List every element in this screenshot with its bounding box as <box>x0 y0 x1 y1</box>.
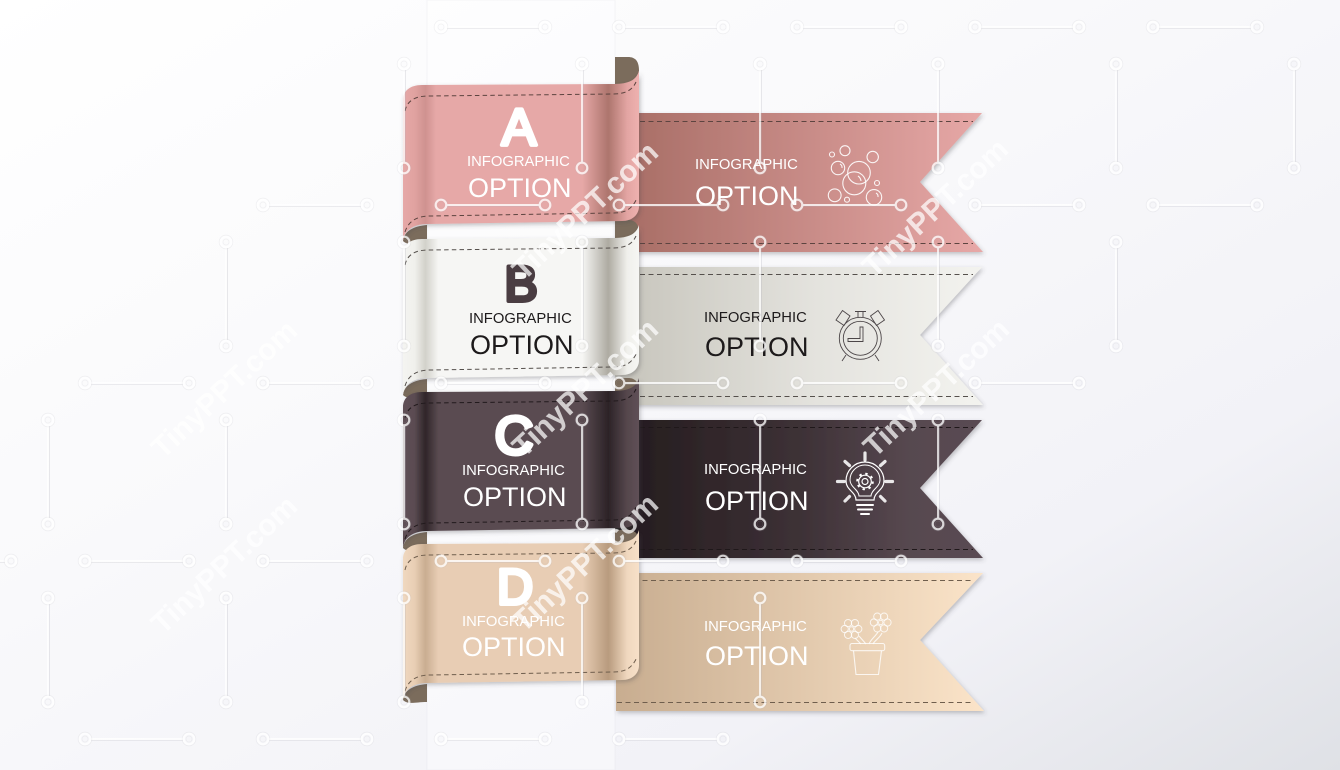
letter C: C <box>494 406 534 466</box>
watermarks: TinyPPT.com <box>506 136 665 287</box>
ribbon C text <box>462 463 567 512</box>
ribbon C text: INFOGRAPHIC <box>462 463 565 479</box>
flag B text: INFOGRAPHIC <box>704 310 807 326</box>
ribbon D text: INFOGRAPHIC <box>462 614 565 630</box>
ribbon B <box>403 225 639 395</box>
flag A text <box>695 157 799 211</box>
flag banner A <box>615 113 983 252</box>
letter B: B <box>504 256 538 312</box>
flag A text: INFOGRAPHIC <box>695 157 798 173</box>
letter A: A <box>502 99 537 157</box>
ribbon A text: INFOGRAPHIC <box>467 154 570 170</box>
flag D text: OPTION <box>705 641 809 671</box>
icon: bubbles <box>828 146 882 205</box>
flag A text: OPTION <box>695 181 799 211</box>
flag D text: INFOGRAPHIC <box>704 619 807 635</box>
flag banner B <box>615 267 983 405</box>
flag B text: OPTION <box>705 332 809 362</box>
watermarks: TinyPPT.com <box>506 313 665 464</box>
ribbon A text: OPTION <box>468 173 572 203</box>
icon: flower pot <box>841 613 891 674</box>
ribbon C <box>403 378 639 548</box>
ribbon B text: INFOGRAPHIC <box>469 311 572 327</box>
flag banner C <box>615 420 983 558</box>
flag C text: OPTION <box>705 486 809 516</box>
vertical white band behind ribbons <box>427 0 615 770</box>
ribbon D text <box>462 614 566 662</box>
ribbon A <box>403 71 639 241</box>
ribbon C text: OPTION <box>463 482 567 512</box>
letter D: D <box>497 559 533 615</box>
watermarks <box>145 133 1016 641</box>
watermarks: TinyPPT.com <box>506 488 665 639</box>
flag B text <box>704 310 809 362</box>
ribbon A text <box>467 154 572 203</box>
watermarks: TinyPPT.com <box>145 314 304 465</box>
flag C text <box>704 462 809 516</box>
icon: light bulb with gear <box>838 453 892 514</box>
flag D text <box>704 619 809 671</box>
watermarks: TinyPPT.com <box>857 313 1016 464</box>
ribbon B text <box>469 311 574 360</box>
watermarks: TinyPPT.com <box>856 133 1015 284</box>
ribbon D text: OPTION <box>462 632 566 662</box>
flag banner D <box>616 573 984 711</box>
watermarks: TinyPPT.com <box>145 490 304 641</box>
ribbon B text: OPTION <box>470 330 574 360</box>
icon: alarm clock <box>836 310 884 361</box>
ribbon back curls <box>403 57 639 703</box>
flag C text: INFOGRAPHIC <box>704 462 807 478</box>
ribbon D <box>403 530 639 700</box>
